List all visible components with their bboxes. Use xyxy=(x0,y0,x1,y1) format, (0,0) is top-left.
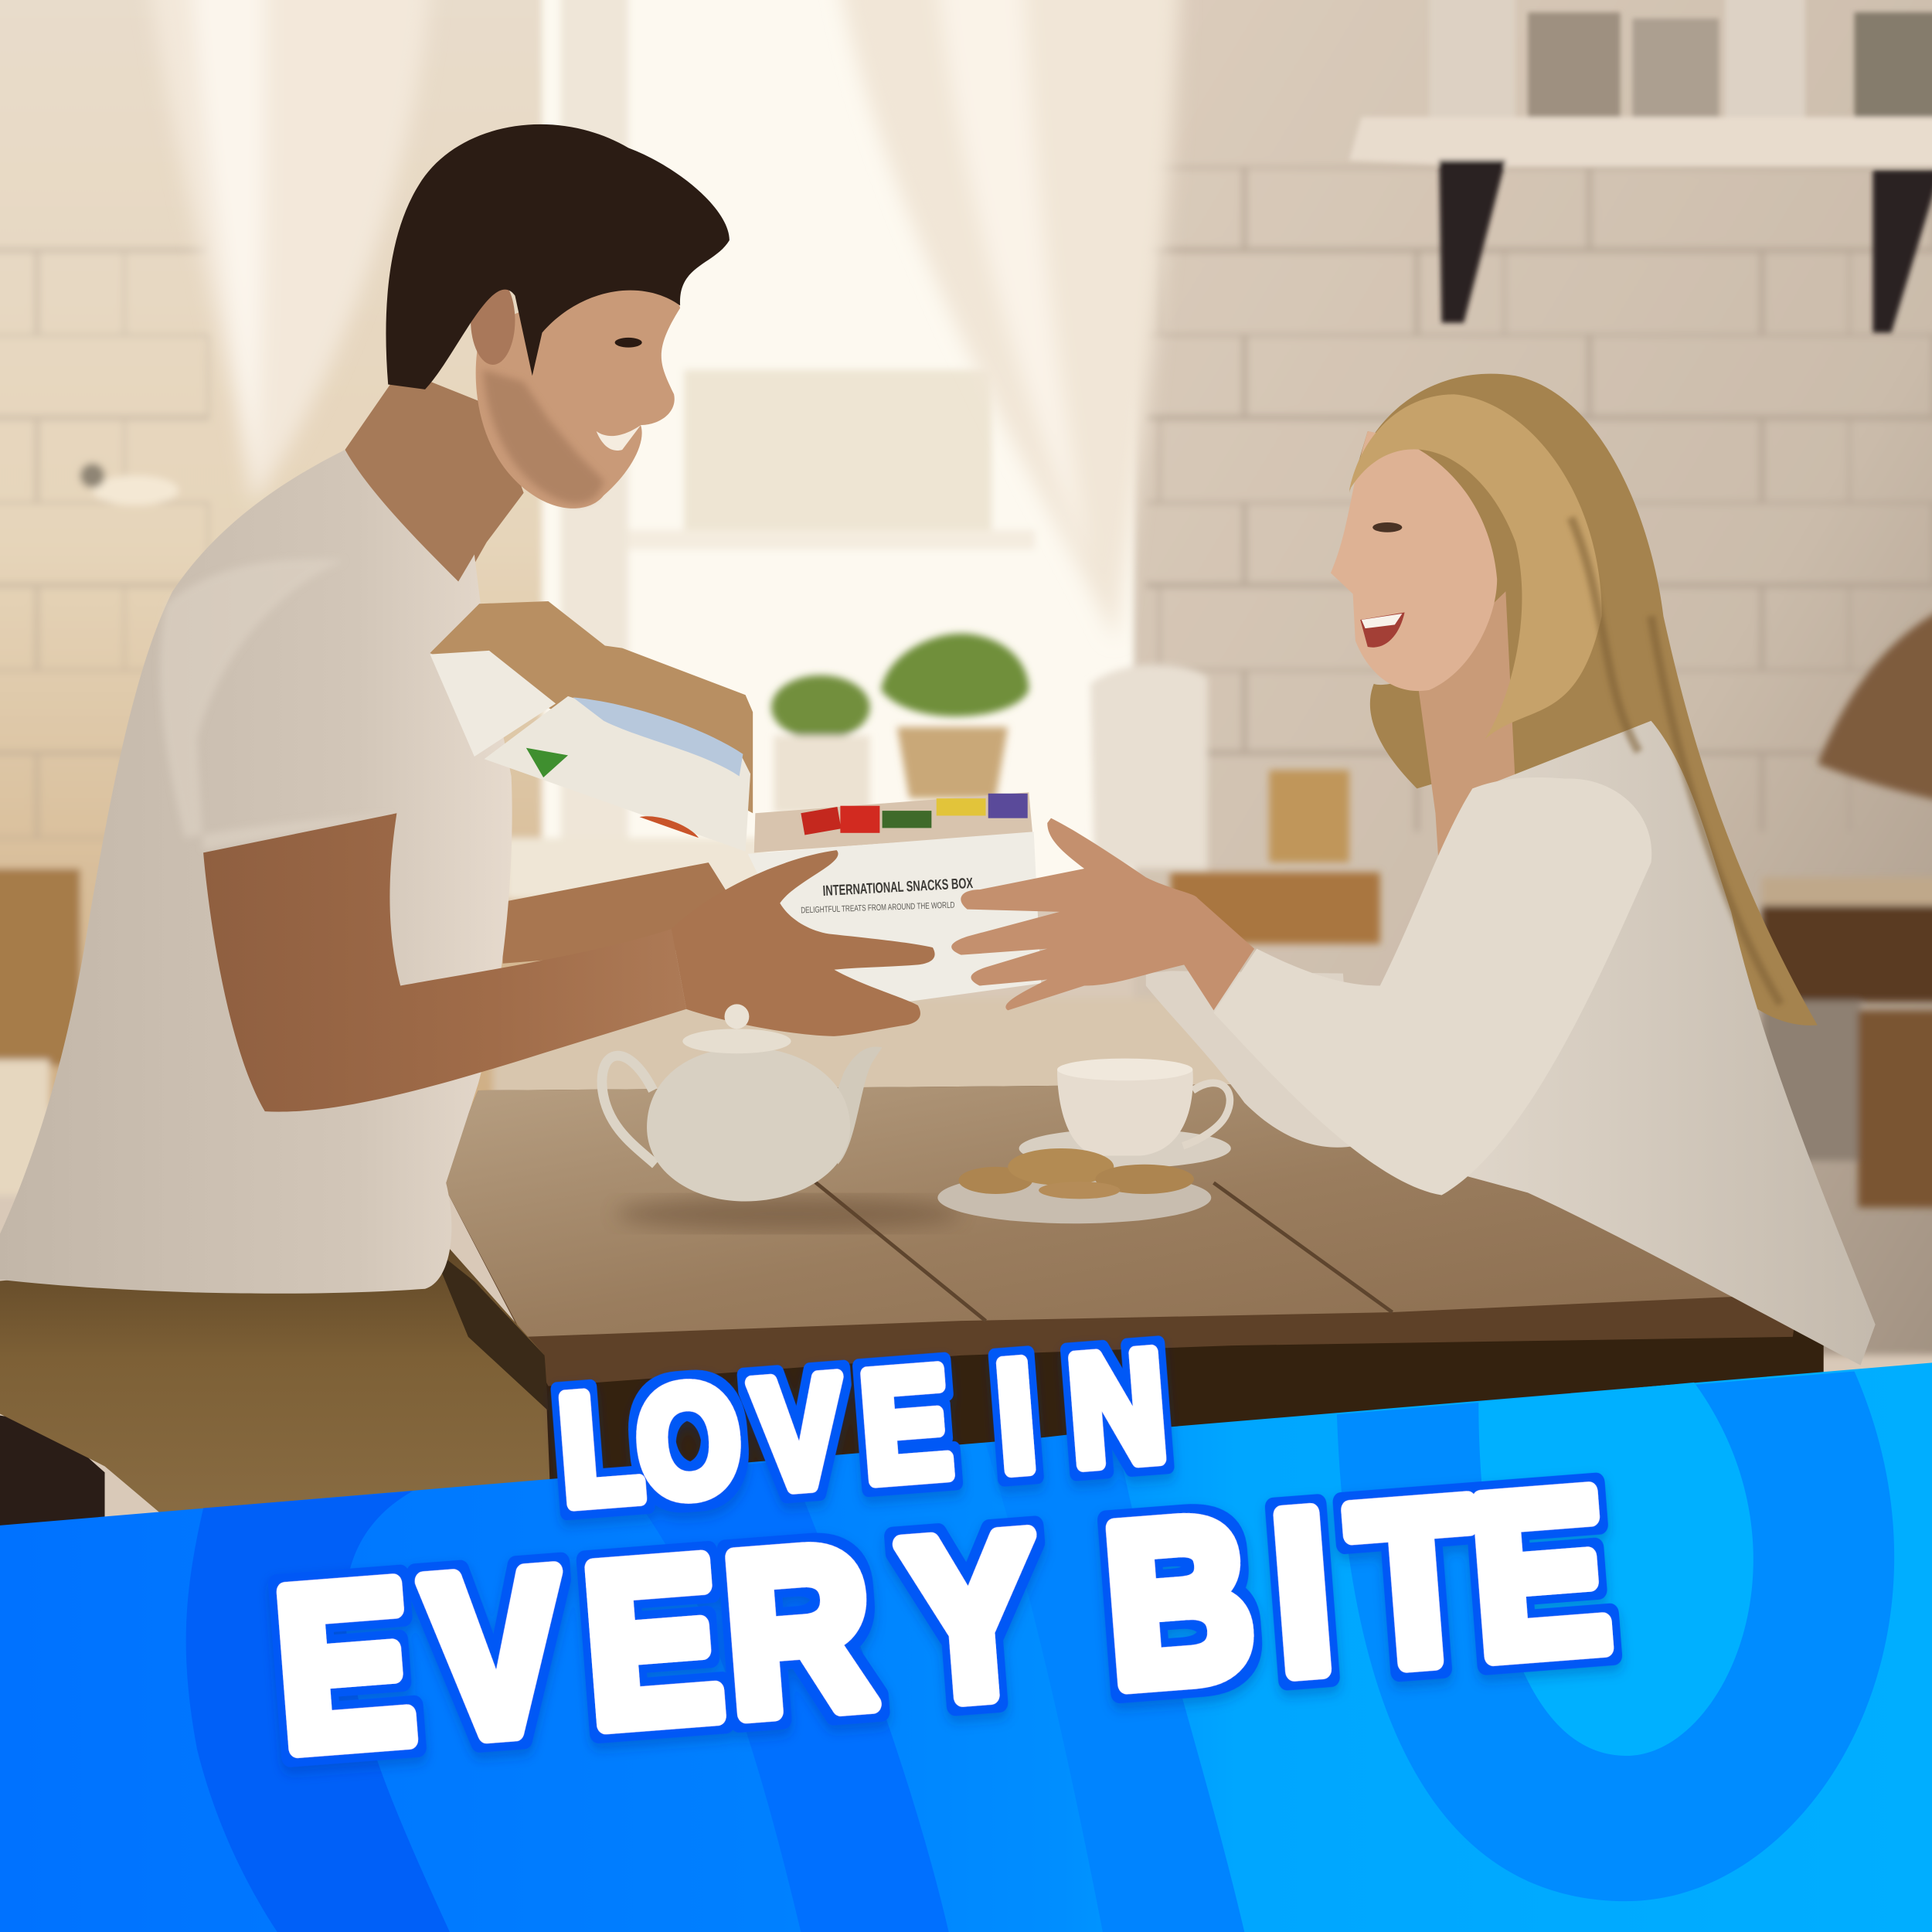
sweater near sleeve xyxy=(1213,777,1651,1196)
neck xyxy=(1417,591,1515,949)
man xyxy=(0,124,740,1534)
t-shirt xyxy=(0,450,512,1294)
eye xyxy=(615,338,642,348)
smile xyxy=(597,425,641,451)
trouser shadow xyxy=(431,1247,549,1411)
teapot xyxy=(602,1004,883,1202)
box title: INTERNATIONAL SNACKS BOX xyxy=(822,876,974,900)
trousers xyxy=(0,1242,552,1534)
neck xyxy=(345,369,524,585)
headline line 1: LOVE IN xyxy=(553,1318,1172,1538)
cup and saucer xyxy=(1019,1059,1231,1168)
near arm xyxy=(203,813,686,1112)
stool xyxy=(0,1414,105,1530)
hair back xyxy=(1349,374,1818,1026)
hair front xyxy=(1349,394,1602,740)
face xyxy=(1331,431,1497,691)
right ring centre xyxy=(1478,1383,1753,1756)
sweater body xyxy=(1355,721,1876,1366)
flap decoration: cloud xyxy=(573,697,743,776)
right ring xyxy=(1337,1372,1894,1901)
headline line 2: EVERY BITE xyxy=(268,1440,1617,1798)
man's hand xyxy=(672,850,935,1036)
box contents: candies xyxy=(754,792,1032,852)
face xyxy=(476,284,680,509)
shelf with jars xyxy=(1349,0,1932,332)
kettle xyxy=(1090,665,1207,869)
sleeve fold xyxy=(160,559,394,850)
plate of cookies xyxy=(937,1148,1211,1223)
woman xyxy=(1146,374,1876,1366)
banner wave bands xyxy=(186,1372,1894,1932)
box flap: cardboard inside xyxy=(430,601,753,813)
potted plants xyxy=(771,634,1029,813)
far sleeve xyxy=(1146,971,1355,1148)
blue banner xyxy=(0,1362,1932,1932)
far arm xyxy=(503,862,740,964)
hair xyxy=(386,124,730,389)
flap decoration: red arc xyxy=(639,816,699,838)
woman's hand xyxy=(951,818,1254,1010)
smile xyxy=(1360,612,1405,648)
eye xyxy=(1372,522,1402,532)
box body xyxy=(748,832,1041,1003)
hair strands xyxy=(1571,518,1781,1004)
snack box xyxy=(430,601,1041,1003)
curtains xyxy=(148,0,1180,641)
teeth xyxy=(1362,614,1402,628)
beard shadow xyxy=(483,369,604,504)
counter and kitchen items xyxy=(1171,610,1932,1207)
box description: DELIGHTFUL TREATS FROM AROUND THE WORLD xyxy=(801,900,955,915)
flap decoration: green triangle xyxy=(526,748,568,777)
box flap: printed right panel xyxy=(485,696,750,852)
box flap: printed left panel xyxy=(430,651,556,757)
table xyxy=(441,1084,1824,1534)
teapot shadow xyxy=(616,1196,961,1231)
ear xyxy=(471,276,515,365)
headline xyxy=(268,1318,1617,1798)
